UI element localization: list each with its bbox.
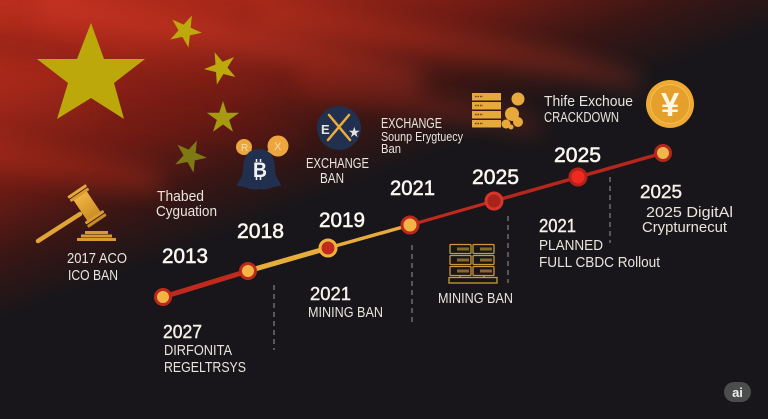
icon: bitcoin bag with coins: X — [274, 141, 282, 153]
small star 2 — [200, 46, 241, 87]
year labels above line: 2025 — [554, 144, 601, 167]
badge: ai — [724, 382, 751, 402]
label: 2017 ICO ban: ICO BAN — [68, 267, 118, 284]
label: 2021 mining ban — [308, 284, 383, 321]
year labels above line: 2019 — [319, 209, 365, 232]
small star 4 — [170, 134, 212, 175]
label: exchange sub text — [381, 115, 463, 156]
small star 3 — [207, 101, 239, 132]
label: 2027 regulatory: DIRFONITA — [164, 342, 232, 359]
icon: gavel — [38, 184, 116, 241]
icon: exchange X coin: E — [321, 122, 330, 137]
label: Thabed Cyguation: Thabed — [157, 188, 204, 205]
label: exchange sub text: Ban — [381, 141, 401, 156]
icon: bitcoin bag with coins: R — [241, 143, 248, 154]
timeline line — [163, 153, 663, 297]
label: Thife Exchoue crackdown — [544, 93, 633, 126]
label: 2025 digital currency — [640, 182, 733, 236]
label: 2027 regulatory: 2027 — [163, 322, 202, 342]
label: 2025 digital currency: 2025 DigitAl — [646, 204, 733, 221]
label: exchange ban: BAN — [320, 170, 344, 187]
icon: bitcoin bag with coins — [236, 136, 288, 189]
year labels above line: 2013 — [162, 245, 208, 268]
year labels above line: 2018 — [237, 220, 284, 243]
dashed connectors — [274, 177, 610, 350]
label: exchange sub text: Sounp Erygtuecy — [381, 129, 463, 144]
year labels above line: 2021 — [390, 177, 435, 200]
label: 2021 planned full CBDC rollout: 2021 — [539, 216, 576, 236]
icon: mining server rack — [449, 244, 497, 283]
icon: yuan coin — [646, 80, 694, 128]
label: exchange ban — [306, 155, 369, 187]
label: 2025 digital currency: 2025 — [640, 182, 682, 202]
label: Thife Exchoue crackdown: CRACKDOWN — [544, 109, 619, 126]
icon: exchange X coin: ★ — [348, 124, 361, 140]
label: 2021 mining ban: 2021 — [310, 284, 351, 304]
icon: yuan coin: ¥ — [661, 86, 680, 123]
badge: ai: ai — [732, 385, 743, 400]
icon: bitcoin bag with coins: B — [253, 159, 267, 182]
icon: servers and coins — [472, 92, 524, 130]
label: 2017 ICO ban — [67, 250, 127, 284]
year labels above line: 2025 — [472, 166, 519, 189]
label: 2021 mining ban: MINING BAN — [308, 304, 383, 321]
label: mining ban: MINING BAN — [438, 290, 513, 307]
label: exchange sub text: EXCHANGE — [381, 115, 442, 132]
label: 2021 planned full CBDC rollout: PLANNED — [539, 237, 603, 254]
label: 2025 digital currency: Crypturnecut — [642, 219, 728, 236]
small star 1 — [165, 9, 207, 50]
label: 2017 ICO ban: 2017 ACO — [67, 250, 127, 267]
flag stars — [37, 9, 241, 175]
label: exchange ban: EXCHANGE — [306, 155, 369, 172]
timeline nodes — [156, 146, 670, 304]
label: 2027 regulatory: REGELTRSYS — [164, 359, 246, 376]
label: 2021 planned full CBDC rollout: FULL CBDC Rollout — [539, 254, 661, 271]
label: Thabed Cyguation — [156, 188, 217, 220]
icon: exchange X coin — [317, 106, 361, 150]
label: 2027 regulatory — [163, 322, 246, 376]
label: Thife Exchoue crackdown: Thife Exchoue — [544, 93, 633, 110]
label: 2021 planned full CBDC rollout — [539, 216, 661, 271]
year labels above line — [162, 144, 601, 268]
label: Thabed Cyguation: Cyguation — [156, 203, 217, 220]
large star — [37, 23, 145, 119]
